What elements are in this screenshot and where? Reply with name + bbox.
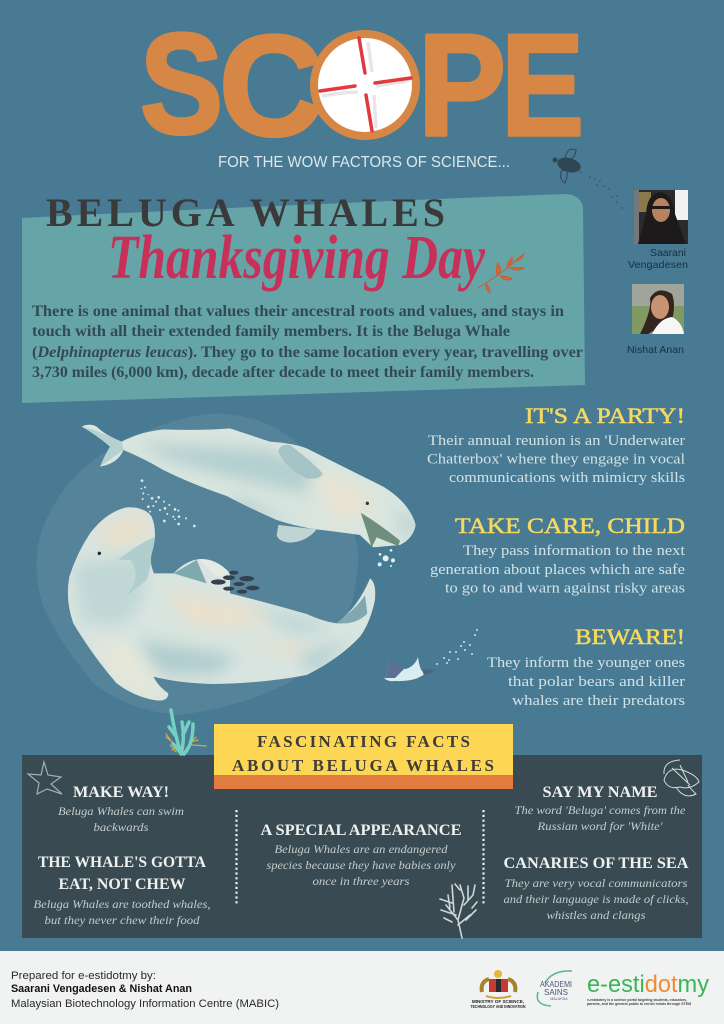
fact: the whale's gotta eat: EAT, NOT CHEW (58, 876, 186, 893)
heading: Thanksgiving Day: Thanksgiving Day (108, 224, 485, 292)
icon: turtle outline (664, 760, 699, 796)
logo lens O (310, 30, 420, 140)
body text: They inform the younger ones (487, 655, 685, 671)
author: Nishat Anan (627, 284, 684, 356)
body text: whales are their predators (512, 693, 685, 709)
panel: fascinating facts (22, 710, 702, 938)
fact: the whale's gotta eat (34, 854, 210, 927)
body text (427, 433, 685, 486)
school of fish (211, 571, 259, 594)
fact: canaries of the sea: and their language is made of clicks, (504, 892, 688, 906)
logo: SCOPE (140, 4, 584, 166)
fact: a special appearance (260, 822, 462, 888)
logo letters: E (501, 4, 584, 166)
fact: a special appearance: A SPECIAL APPEARANCE (260, 822, 462, 839)
fact: canaries of the sea (504, 855, 689, 922)
fact: canaries of the sea: CANARIES OF THE SEA (504, 855, 689, 872)
body text: that polar bears and killer (508, 674, 685, 690)
intro paragraph (32, 303, 583, 381)
body text: to go to and warn against risky areas (445, 580, 685, 596)
heading: TAKE CARE, CHILD (455, 513, 685, 538)
credits: Prepared for e-estidotmy by: (11, 970, 156, 982)
footer background (0, 951, 724, 1024)
name (628, 247, 688, 271)
name: Saarani (650, 247, 686, 259)
body text: Their annual reunion is an 'Underwater (428, 433, 685, 449)
heading: IT'S A PARTY! (525, 403, 685, 428)
upper whale (82, 424, 416, 548)
name: Nishat Anan (627, 344, 684, 356)
heading: BEWARE! (575, 624, 685, 649)
fact: canaries of the sea: They are very vocal communicators (504, 876, 688, 890)
icon: manta ray with bubbles (384, 629, 478, 681)
backdrop halo (37, 413, 358, 715)
logo letters: P (418, 4, 506, 166)
fact: make way: Beluga Whales can swim (58, 804, 184, 818)
logo: e-estidotmy: e-estidotmy is a science portal targeting students, educators, (587, 998, 687, 1002)
body text (487, 655, 685, 709)
intro paragraph: (Delphinapterus leucas). They go to the same location every year, travelling over (32, 344, 583, 361)
fact: a special appearance: Beluga Whales are an endangered (274, 842, 449, 856)
author: Saarani Vengadesen (628, 190, 688, 271)
logo letters (140, 4, 584, 166)
fact: the whale's gotta eat: but they never chew their food (44, 913, 201, 927)
icon: coral outline (440, 884, 477, 938)
heading: Beluga Whales: BELUGA WHALES (46, 190, 445, 235)
section: Beware (487, 624, 685, 709)
banner: fascinating facts (214, 724, 513, 789)
credits (11, 970, 279, 1010)
mouth (361, 513, 400, 547)
logo: e-estidotmy: e-estidotmy (587, 971, 709, 998)
credits: Saarani Vengadesen & Nishat Anan (11, 983, 192, 995)
flipper (278, 445, 323, 479)
body text: generation about places which are safe (430, 562, 685, 578)
footer (0, 951, 724, 1024)
icon: sea turtle with bubbles (552, 149, 623, 209)
fact: the whale's gotta eat: Beluga Whales are toothed whales, (34, 897, 210, 911)
banner title (232, 732, 494, 775)
logo: ministry crest (470, 970, 526, 1009)
bubbles near upper whale (378, 549, 395, 567)
name: Vengadesen (628, 259, 688, 271)
body text: Chatterbox' where they engage in vocal (427, 452, 685, 468)
section: Take care, child (430, 513, 686, 596)
banner fill (214, 724, 513, 775)
bubbles near lower whale (140, 479, 196, 527)
fact: say my name: The word 'Beluga' comes from the (514, 803, 686, 817)
banner title: ABOUT BELUGA WHALES (232, 756, 494, 775)
tagline: FOR THE WOW FACTORS OF SCIENCE... (218, 154, 510, 171)
logo: ministry crest: TECHNOLOGY AND INNOVATION (470, 1004, 526, 1009)
logo: ministry crest: MINISTRY OF SCIENCE, (472, 999, 524, 1004)
fact: say my name: Russian word for 'White' (536, 819, 663, 833)
panel background (22, 755, 702, 938)
body text: They pass information to the next (463, 543, 686, 559)
fact: a special appearance: species because they have babies only (266, 858, 456, 872)
body text: communications with mimicry skills (449, 470, 685, 486)
fact: say my name (514, 784, 686, 833)
panel: introduction (22, 190, 585, 403)
logo: e-estidotmy: parents, and the general public to enrich minds through STEM (587, 1002, 691, 1006)
illustration: two beluga whales (30, 410, 430, 715)
section: It's a party (427, 403, 685, 486)
logo letters: S (140, 5, 223, 164)
icon: autumn leaves (478, 254, 524, 293)
portrait (632, 284, 684, 334)
logo letters: C (219, 7, 323, 166)
fact: say my name: SAY MY NAME (542, 784, 658, 801)
fact: the whale's gotta eat: THE WHALE'S GOTTA (38, 854, 206, 871)
body text (430, 543, 686, 596)
logo: Akademi Sains: SAINS (544, 988, 568, 997)
portrait (634, 190, 688, 244)
intro paragraph: touch with all their extended family members. It is the Beluga Whale (32, 323, 510, 340)
logo: Akademi Sains (537, 971, 572, 1006)
intro paragraph: 3,730 miles (6,000 km), decade after decade to meet their family members. (32, 364, 534, 381)
icon: starfish outline (28, 762, 62, 794)
logo: Akademi Sains: AKADEMI (540, 980, 572, 989)
credits: Malaysian Biotechnology Information Centre (MABIC) (11, 998, 279, 1010)
lower whale (68, 507, 376, 701)
fact: make way (58, 784, 184, 834)
fact: make way: MAKE WAY! (73, 784, 169, 801)
banner title: FASCINATING FACTS (257, 732, 470, 751)
fact: make way: backwards (94, 820, 149, 834)
icon: coral (166, 710, 206, 754)
fact: a special appearance: once in three years (312, 874, 410, 888)
panel shape (22, 194, 585, 403)
logo: Akademi Sains: MALAYSIA (550, 997, 568, 1001)
fact: canaries of the sea: whistles and clangs (546, 908, 646, 922)
dotted dividers (236, 810, 484, 905)
intro paragraph: There is one animal that values their ancestral roots and values, and stays in (32, 303, 564, 320)
